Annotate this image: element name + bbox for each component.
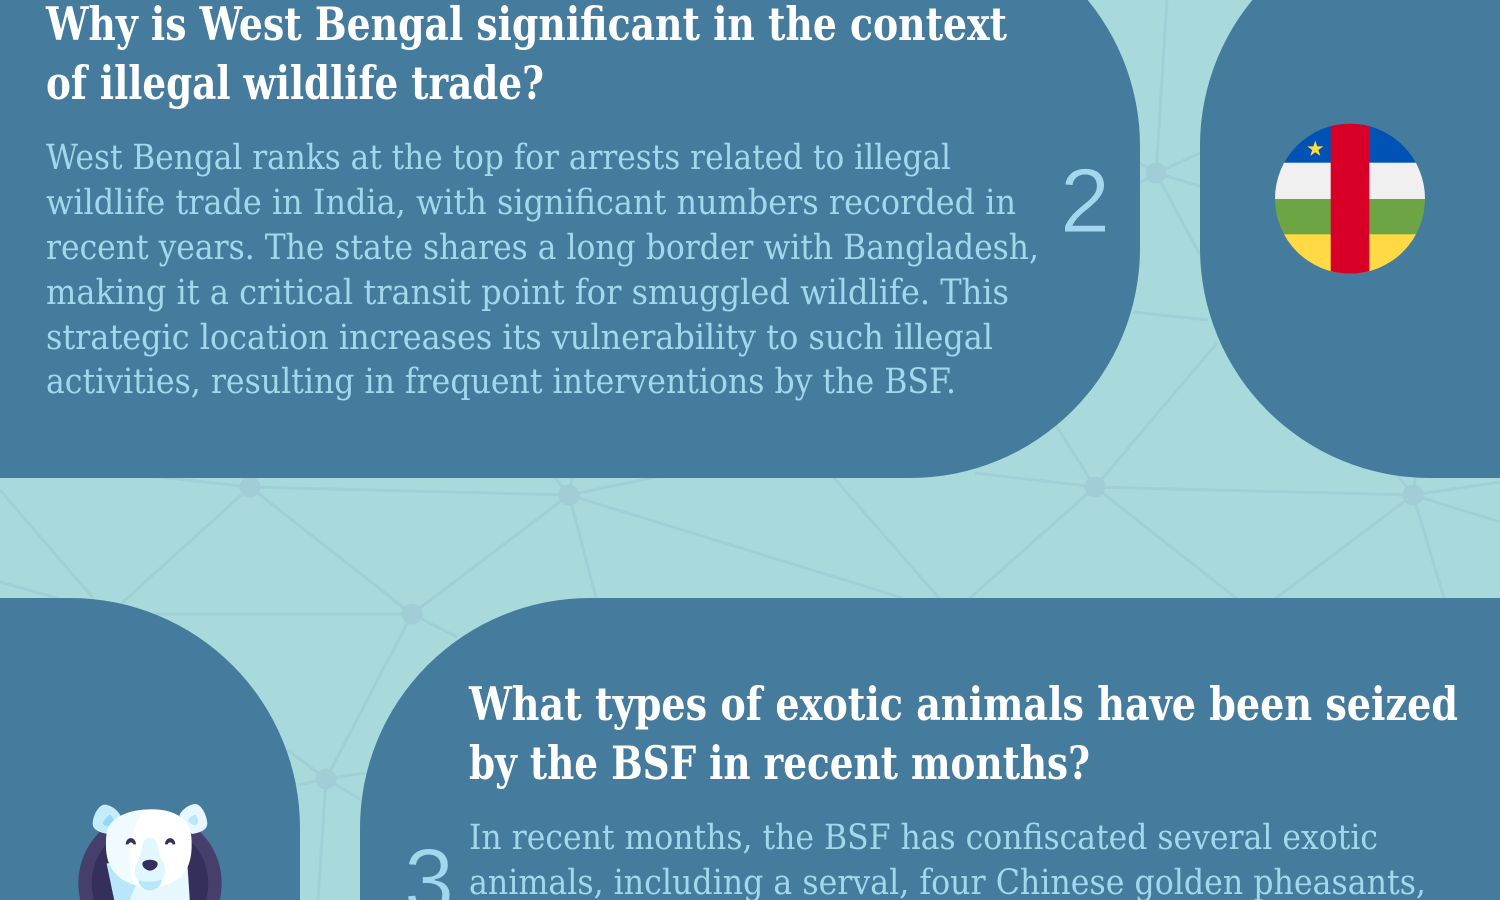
text block: West Bengal answer — [46, 138, 1039, 402]
text block: exotic animals answer — [469, 818, 1426, 900]
text block: exotic animals answer: In recent months, the BSF has confiscated several exotic — [469, 818, 1378, 858]
panel: question 3 — [360, 598, 1500, 900]
heading: exotic animals question: by the BSF in recent months? — [469, 736, 1090, 790]
heading: West Bengal question: of illegal wildlife trade? — [46, 56, 544, 110]
text block: West Bengal answer: making it a critical transit point for smuggled wildlife. This — [46, 273, 1009, 313]
text block: West Bengal answer: West Bengal ranks at the top for arrests related to illegal — [46, 138, 951, 178]
icon: polar bear — [78, 804, 222, 900]
text block: West Bengal answer: activities, resulting in frequent interventions by the BSF. — [46, 362, 956, 402]
panel: flag — [1200, 0, 1500, 478]
text block: West Bengal answer: recent years. The state shares a long border with Bangladesh, — [46, 228, 1039, 268]
panel: polar bear — [0, 598, 300, 900]
number 2: 2 — [1060, 151, 1110, 252]
text block: West Bengal answer: strategic location increases its vulnerability to such illegal — [46, 318, 993, 358]
icon: Central African Republic flag — [1275, 124, 1425, 274]
panel: question 2 — [0, 0, 1140, 478]
heading: exotic animals question — [468, 677, 1458, 790]
text block: West Bengal answer: wildlife trade in India, with significant numbers recorded in — [46, 183, 1016, 223]
heading: West Bengal question — [45, 0, 1008, 110]
